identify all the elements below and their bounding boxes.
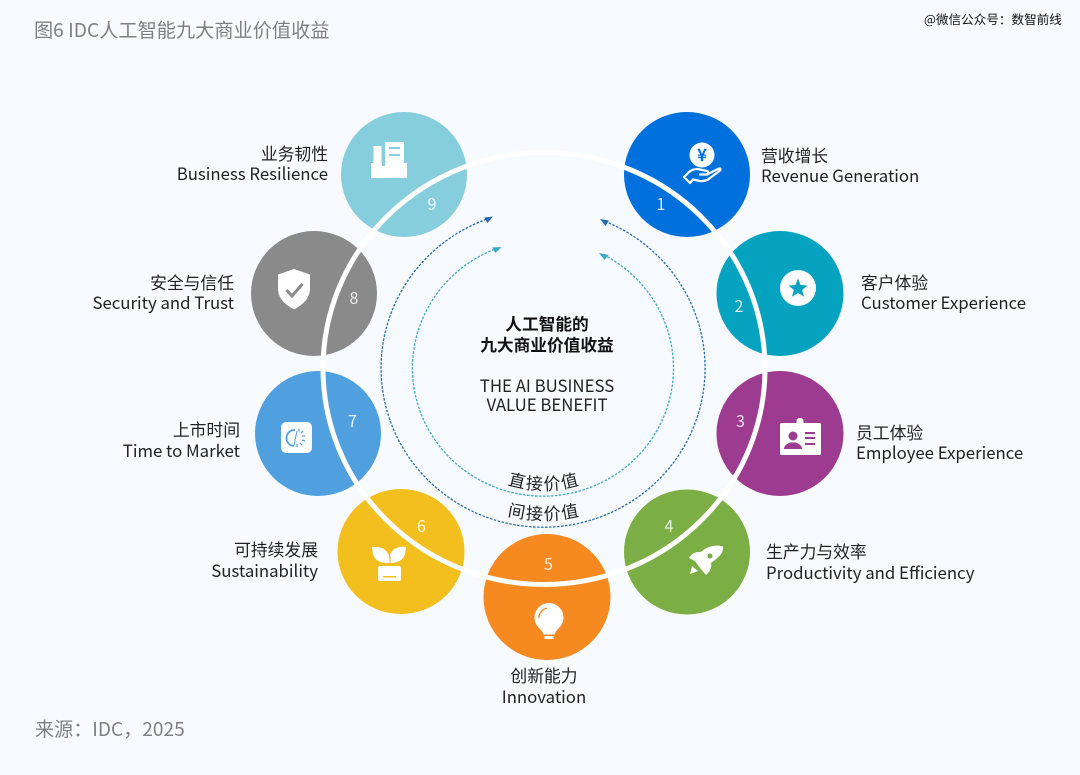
watermark: @微信公众号：数智前线 bbox=[924, 9, 1062, 28]
label 3 bbox=[856, 420, 1023, 464]
icon: yen coin and hand: ¥ bbox=[697, 141, 707, 166]
circle 6 bbox=[338, 489, 464, 614]
label 9: 业务韧性 bbox=[261, 141, 328, 165]
label: direct value: 直接价值 bbox=[508, 472, 578, 492]
circle numbers: 3 bbox=[736, 408, 745, 432]
label 3: 员工体验 bbox=[856, 420, 923, 444]
label 4 bbox=[766, 539, 975, 584]
icon: speed gauge bbox=[281, 422, 312, 453]
label 5: Innovation bbox=[502, 684, 586, 708]
center heading bbox=[480, 311, 614, 416]
panel: nine benefit circles bbox=[251, 112, 844, 660]
circle numbers: 2 bbox=[735, 293, 744, 317]
label: indirect value: 间接价值 bbox=[508, 502, 579, 522]
circle 7 bbox=[255, 371, 381, 496]
circle 5 bbox=[484, 534, 610, 660]
label 1 bbox=[761, 143, 919, 187]
center heading: VALUE BENEFIT bbox=[486, 392, 608, 416]
chart: outer dashed arc (indirect value) bbox=[381, 216, 705, 527]
label 7 bbox=[123, 417, 241, 462]
source: 来源：IDC，2025 bbox=[35, 714, 185, 742]
label 2 bbox=[861, 270, 1026, 314]
icon: shield with check bbox=[278, 269, 310, 310]
circle 3 bbox=[716, 371, 844, 496]
label 1: 营收增长 bbox=[761, 143, 828, 167]
icon: plant in pot bbox=[372, 547, 406, 581]
circle 9 bbox=[341, 112, 467, 237]
circle 8 bbox=[251, 231, 377, 356]
circle numbers: 1 bbox=[657, 191, 665, 215]
label 9: Business Resilience bbox=[177, 161, 328, 185]
icon: employee id badge bbox=[780, 418, 821, 455]
circle 4 bbox=[624, 490, 750, 614]
label 8 bbox=[92, 270, 235, 314]
icon: documents in tray bbox=[371, 142, 407, 178]
label 2: 客户体验 bbox=[861, 270, 928, 294]
circle numbers: 4 bbox=[665, 513, 674, 537]
circle 2 bbox=[716, 231, 844, 356]
label 1: Revenue Generation bbox=[761, 163, 919, 187]
icon: star badge bbox=[780, 270, 816, 306]
circle numbers: 6 bbox=[417, 513, 426, 537]
label 7: Time to Market bbox=[123, 438, 241, 462]
circle numbers bbox=[348, 191, 745, 575]
label 4: Productivity and Efficiency bbox=[766, 560, 975, 584]
circle numbers: 9 bbox=[428, 191, 437, 215]
label 6: 可持续发展 bbox=[234, 537, 318, 561]
label 5 bbox=[502, 663, 586, 708]
label 5: 创新能力 bbox=[510, 663, 578, 687]
label 6: Sustainability bbox=[211, 558, 318, 582]
circle numbers: 8 bbox=[350, 285, 359, 309]
label 9 bbox=[177, 141, 328, 185]
circle numbers: 7 bbox=[348, 408, 357, 432]
chart: inner dashed arc (direct value) bbox=[412, 247, 673, 496]
label 8: Security and Trust bbox=[92, 290, 235, 314]
center heading: 九大商业价值收益 bbox=[480, 332, 614, 356]
center heading: THE AI BUSINESS bbox=[480, 373, 614, 397]
circle 1 bbox=[624, 112, 750, 237]
label 3: Employee Experience bbox=[856, 440, 1023, 464]
label 7: 上市时间 bbox=[173, 417, 240, 441]
center heading: 人工智能的 bbox=[505, 311, 589, 335]
circle numbers: 5 bbox=[544, 551, 553, 575]
title: 图6 IDC人工智能九大商业价值收益 bbox=[34, 15, 329, 43]
icon: light bulb bbox=[534, 603, 564, 639]
label 4: 生产力与效率 bbox=[766, 539, 867, 563]
label 2: Customer Experience bbox=[861, 290, 1026, 314]
white ring bbox=[323, 152, 765, 584]
icon: rocket bbox=[689, 546, 723, 575]
label 8: 安全与信任 bbox=[150, 270, 234, 294]
icon: yen coin and hand bbox=[684, 141, 721, 183]
label 6 bbox=[211, 537, 318, 582]
